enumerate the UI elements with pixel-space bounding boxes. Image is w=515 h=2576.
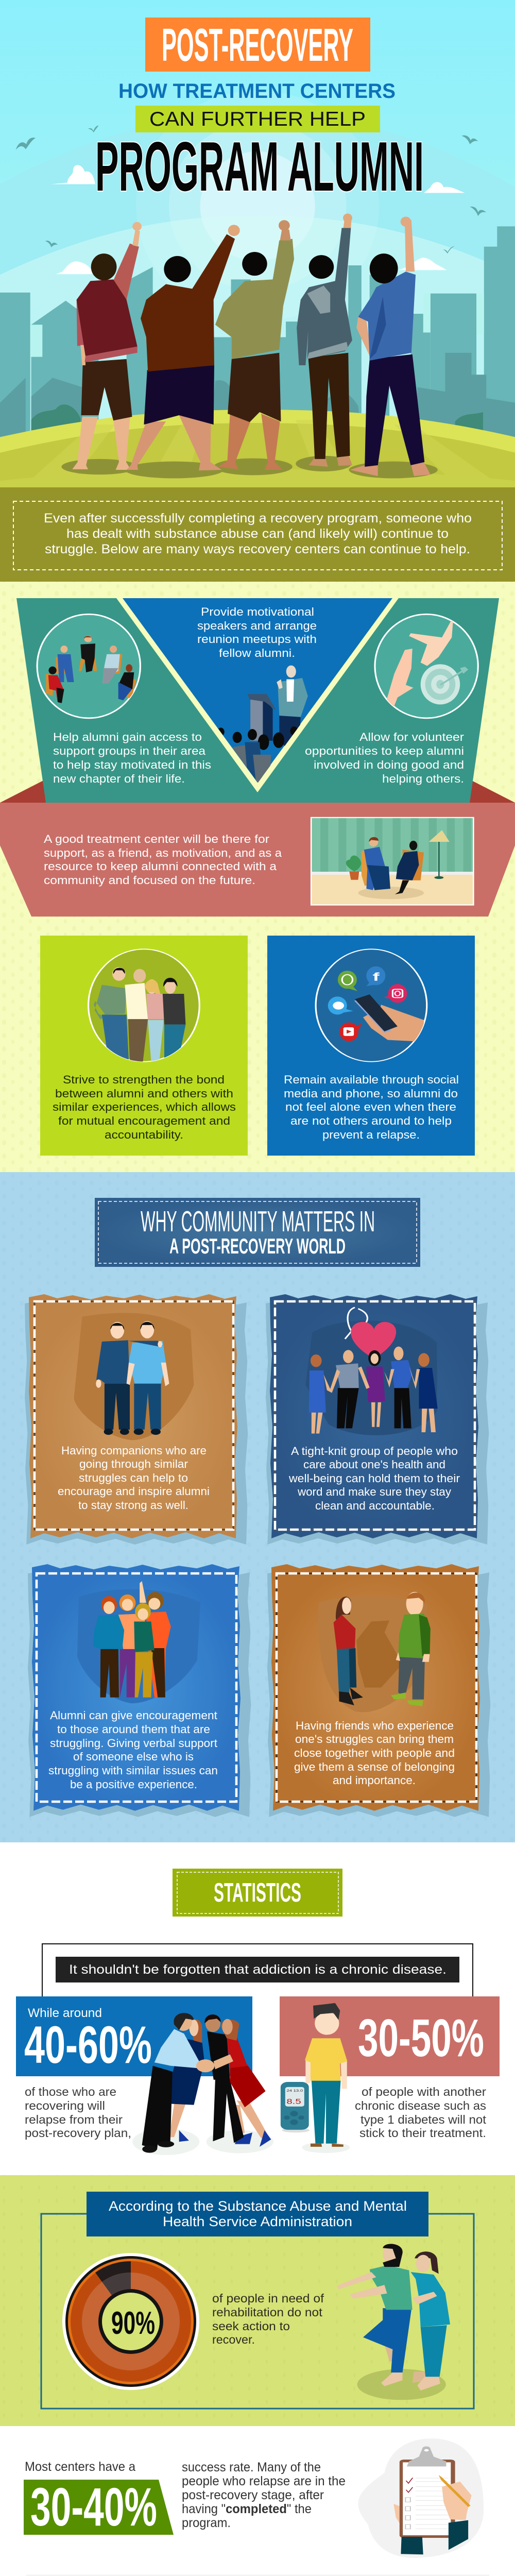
text: provide speakers: fellow alumni. [219, 647, 295, 659]
text: other chronic disease: type 1 diabetes will not [360, 2113, 487, 2126]
frame [41, 2214, 474, 2409]
icon: man with glucose meter: 24 13.0 [286, 2089, 303, 2092]
text: one's struggles can bring them [295, 1733, 454, 1745]
text: are not others around to help [290, 1114, 452, 1127]
text: success rate: program. [182, 2516, 231, 2530]
card: friends and belonging [267, 1564, 490, 1817]
text [58, 1444, 210, 1512]
text: accountability. [105, 1128, 183, 1141]
text [294, 1719, 455, 1787]
heading: according to samhsa [87, 2192, 428, 2236]
text: clean and accountable. [315, 1499, 435, 1512]
text: not feel alone even when there [285, 1100, 456, 1113]
text: going through similar [79, 1458, 188, 1470]
heading: why community matters [95, 1198, 420, 1267]
panel: SAMHSA green section [0, 2175, 515, 2426]
text: encourage and inspire alumni [58, 1485, 210, 1498]
icon: huddle of four people [132, 2013, 273, 2155]
text: volunteer: helping others. [382, 772, 464, 785]
chart: 90% donut: 90% [111, 2306, 155, 2341]
panel: intro: Even after successfully completing a recovery program, someone who [44, 511, 472, 526]
heading: statistics [173, 1869, 342, 1917]
icon: group of friends [89, 949, 199, 1062]
text: word and make sure they stay [297, 1485, 451, 1498]
person 4 [297, 214, 352, 467]
text: rehabilitation: of people in need of [212, 2292, 324, 2305]
panel: 40-60%: While around [28, 2006, 102, 2020]
text: Strive to strengthen the bond [63, 1073, 225, 1086]
text: to those around them that are [57, 1723, 210, 1736]
text: volunteer: opportunities to keep alumni [305, 744, 464, 757]
icon: helping hands circle [375, 614, 478, 718]
icon: two friends and puzzle [318, 1592, 431, 1712]
person 2 [127, 225, 240, 470]
text: volunteer: Allow for volunteer [359, 731, 464, 743]
text: Having friends who experience [296, 1719, 454, 1732]
text: Remain available through social [284, 1073, 459, 1086]
text: similar experiences, which allows [53, 1100, 236, 1113]
heading: why community matters: A POST-RECOVERY WORLD [169, 1234, 346, 1258]
text [288, 1445, 460, 1512]
card: tight-knit group [266, 1294, 489, 1545]
icon: support group circle [37, 614, 140, 718]
icon: social media and phone [316, 949, 427, 1062]
text: provide speakers: Provide motivational [201, 605, 314, 618]
person 5 [350, 217, 431, 476]
text: rehabilitation: seek action to [212, 2319, 290, 2333]
birds [16, 126, 486, 253]
stat: 30-40%: 30-40% [30, 2477, 157, 2537]
title badge: post-recovery [145, 18, 370, 72]
card: encouragement [28, 1564, 251, 1817]
panel: intro: struggle. Below are many ways recovery centers can continue to help. [45, 542, 470, 556]
text: help alumni: support groups in their area [53, 744, 206, 757]
text: help alumni [53, 731, 211, 785]
text: good treatment center [44, 833, 282, 887]
subtitle badge: can further help: CAN FURTHER HELP [149, 108, 366, 130]
text: rehabilitation: rehabilitation do not [212, 2306, 323, 2319]
text: other chronic disease: stick to their treatment. [359, 2126, 486, 2140]
icon: speaker and audience [217, 665, 308, 786]
panel: teal trapezoid [16, 598, 499, 803]
text: Having companions who are [61, 1444, 207, 1457]
subtitle: how treatment centers: HOW TREATMENT CENTERS [118, 80, 396, 103]
chart: 90% donut [62, 2253, 199, 2390]
text: to stay strong as well. [78, 1499, 188, 1512]
text: struggling. Giving verbal support [50, 1737, 217, 1750]
panel: references and footer [16, 2575, 500, 2576]
text: volunteer [305, 731, 464, 785]
text [284, 1073, 459, 1141]
text: success rate: having "completed" the [182, 2502, 312, 2516]
icon: counselling room [311, 818, 473, 905]
icon: family and heart [305, 1308, 438, 1435]
text: A tight-knit group of people who [291, 1445, 458, 1458]
text: relapse: of those who are [25, 2085, 116, 2098]
text: good treatment center: resource to keep alumni connected with a [44, 860, 277, 873]
text: good treatment center: community and focused on the future. [44, 874, 255, 887]
text: be a positive experience. [70, 1778, 197, 1791]
text [53, 1073, 236, 1141]
text: struggles can help to [79, 1471, 188, 1484]
clouds [51, 165, 465, 274]
text [48, 1709, 218, 1791]
text: relapse: post-recovery plan, [25, 2126, 131, 2140]
heading: according to samhsa: Health Service Administration [163, 2214, 352, 2229]
hero illustration [0, 0, 515, 489]
text: success rate: post-recovery stage, after [182, 2488, 324, 2502]
text: care about one's health and [303, 1458, 445, 1471]
card: strengthen the bond [40, 936, 248, 1156]
text: relapse: recovering will [25, 2099, 105, 2112]
text: struggling with similar issues can [48, 1764, 218, 1777]
heading: statistics: STATISTICS [214, 1878, 301, 1908]
callout: chronic disease: It shouldn't be forgotten that addiction is a chronic disease. [69, 1962, 447, 1977]
panel: 30-50% [280, 1996, 500, 2076]
text: help alumni: Help alumni gain access to [53, 731, 202, 743]
text: of someone else who is [73, 1750, 194, 1763]
panel: intro: has dealt with substance abuse can (and likely will) continue to [66, 527, 449, 541]
text: provide speakers: speakers and arrange [197, 619, 317, 632]
text: and importance. [333, 1774, 416, 1787]
text: close together with people and [294, 1747, 455, 1759]
text: success rate: success rate. Many of the [182, 2460, 321, 2475]
card: remain available [267, 936, 475, 1156]
text: most centers: Most centers have a [25, 2460, 135, 2474]
text: good treatment center: A good treatment center will be there for [44, 833, 269, 845]
text: provide speakers: reunion meetups with [197, 633, 317, 646]
text: well-being can hold them to their [288, 1472, 460, 1485]
text: give them a sense of belonging [294, 1760, 455, 1773]
icon: man with glucose meter [281, 2003, 350, 2153]
text: Alumni can give encouragement [50, 1709, 217, 1722]
panel: red support shape [0, 780, 515, 917]
person 1 [72, 222, 142, 470]
icon: man with glucose meter: 8.5 [286, 2097, 301, 2106]
text: success rate [182, 2460, 346, 2530]
panel: cream background [0, 582, 515, 1172]
card: companions [25, 1294, 248, 1545]
text: success rate: people who relapse are in the [182, 2474, 346, 2488]
text: between alumni and others with [55, 1087, 233, 1100]
subtitle badge: can further help [135, 106, 380, 132]
text: good treatment center: support, as a friend, as motivation, and as a [44, 846, 282, 859]
panel: blue community background [0, 1172, 515, 1842]
ground [0, 410, 515, 489]
icon: two men [74, 1313, 194, 1440]
skyline [0, 226, 515, 438]
icon: social media and phone: f [372, 971, 380, 984]
text: other chronic disease: of people with another [362, 2085, 486, 2098]
icon: four friends [77, 1581, 200, 1703]
text: other chronic disease: chronic disease such as [355, 2099, 486, 2112]
text: prevent a relapse. [322, 1128, 420, 1141]
panel: intro [0, 487, 515, 582]
person 3 [215, 220, 294, 470]
text: for mutual encouragement and [58, 1114, 230, 1127]
text: media and phone, so alumni do [284, 1087, 458, 1100]
text: help alumni: to help stay motivated in this [53, 758, 211, 771]
text: volunteer: involved in doing good and [314, 758, 464, 771]
heading: according to samhsa: According to the Substance Abuse and Mental [109, 2198, 407, 2214]
text: rehabilitation: recover. [212, 2333, 255, 2346]
icon: clipboard [358, 2438, 484, 2558]
text: relapse: relapse from their [25, 2113, 123, 2126]
panel: 40-60% [16, 1996, 252, 2076]
text: relapse [25, 2085, 131, 2140]
text: help alumni: new chapter of their life. [53, 772, 185, 785]
callout: chronic disease [42, 1944, 473, 1996]
text: provide speakers [197, 605, 317, 659]
panel: blue triangle [116, 598, 399, 792]
text: other chronic disease [355, 2085, 487, 2140]
panel: 40-60%: 40-60% [24, 2015, 152, 2074]
text: rehabilitation [212, 2292, 324, 2346]
icon: therapist and patient [337, 2244, 450, 2400]
